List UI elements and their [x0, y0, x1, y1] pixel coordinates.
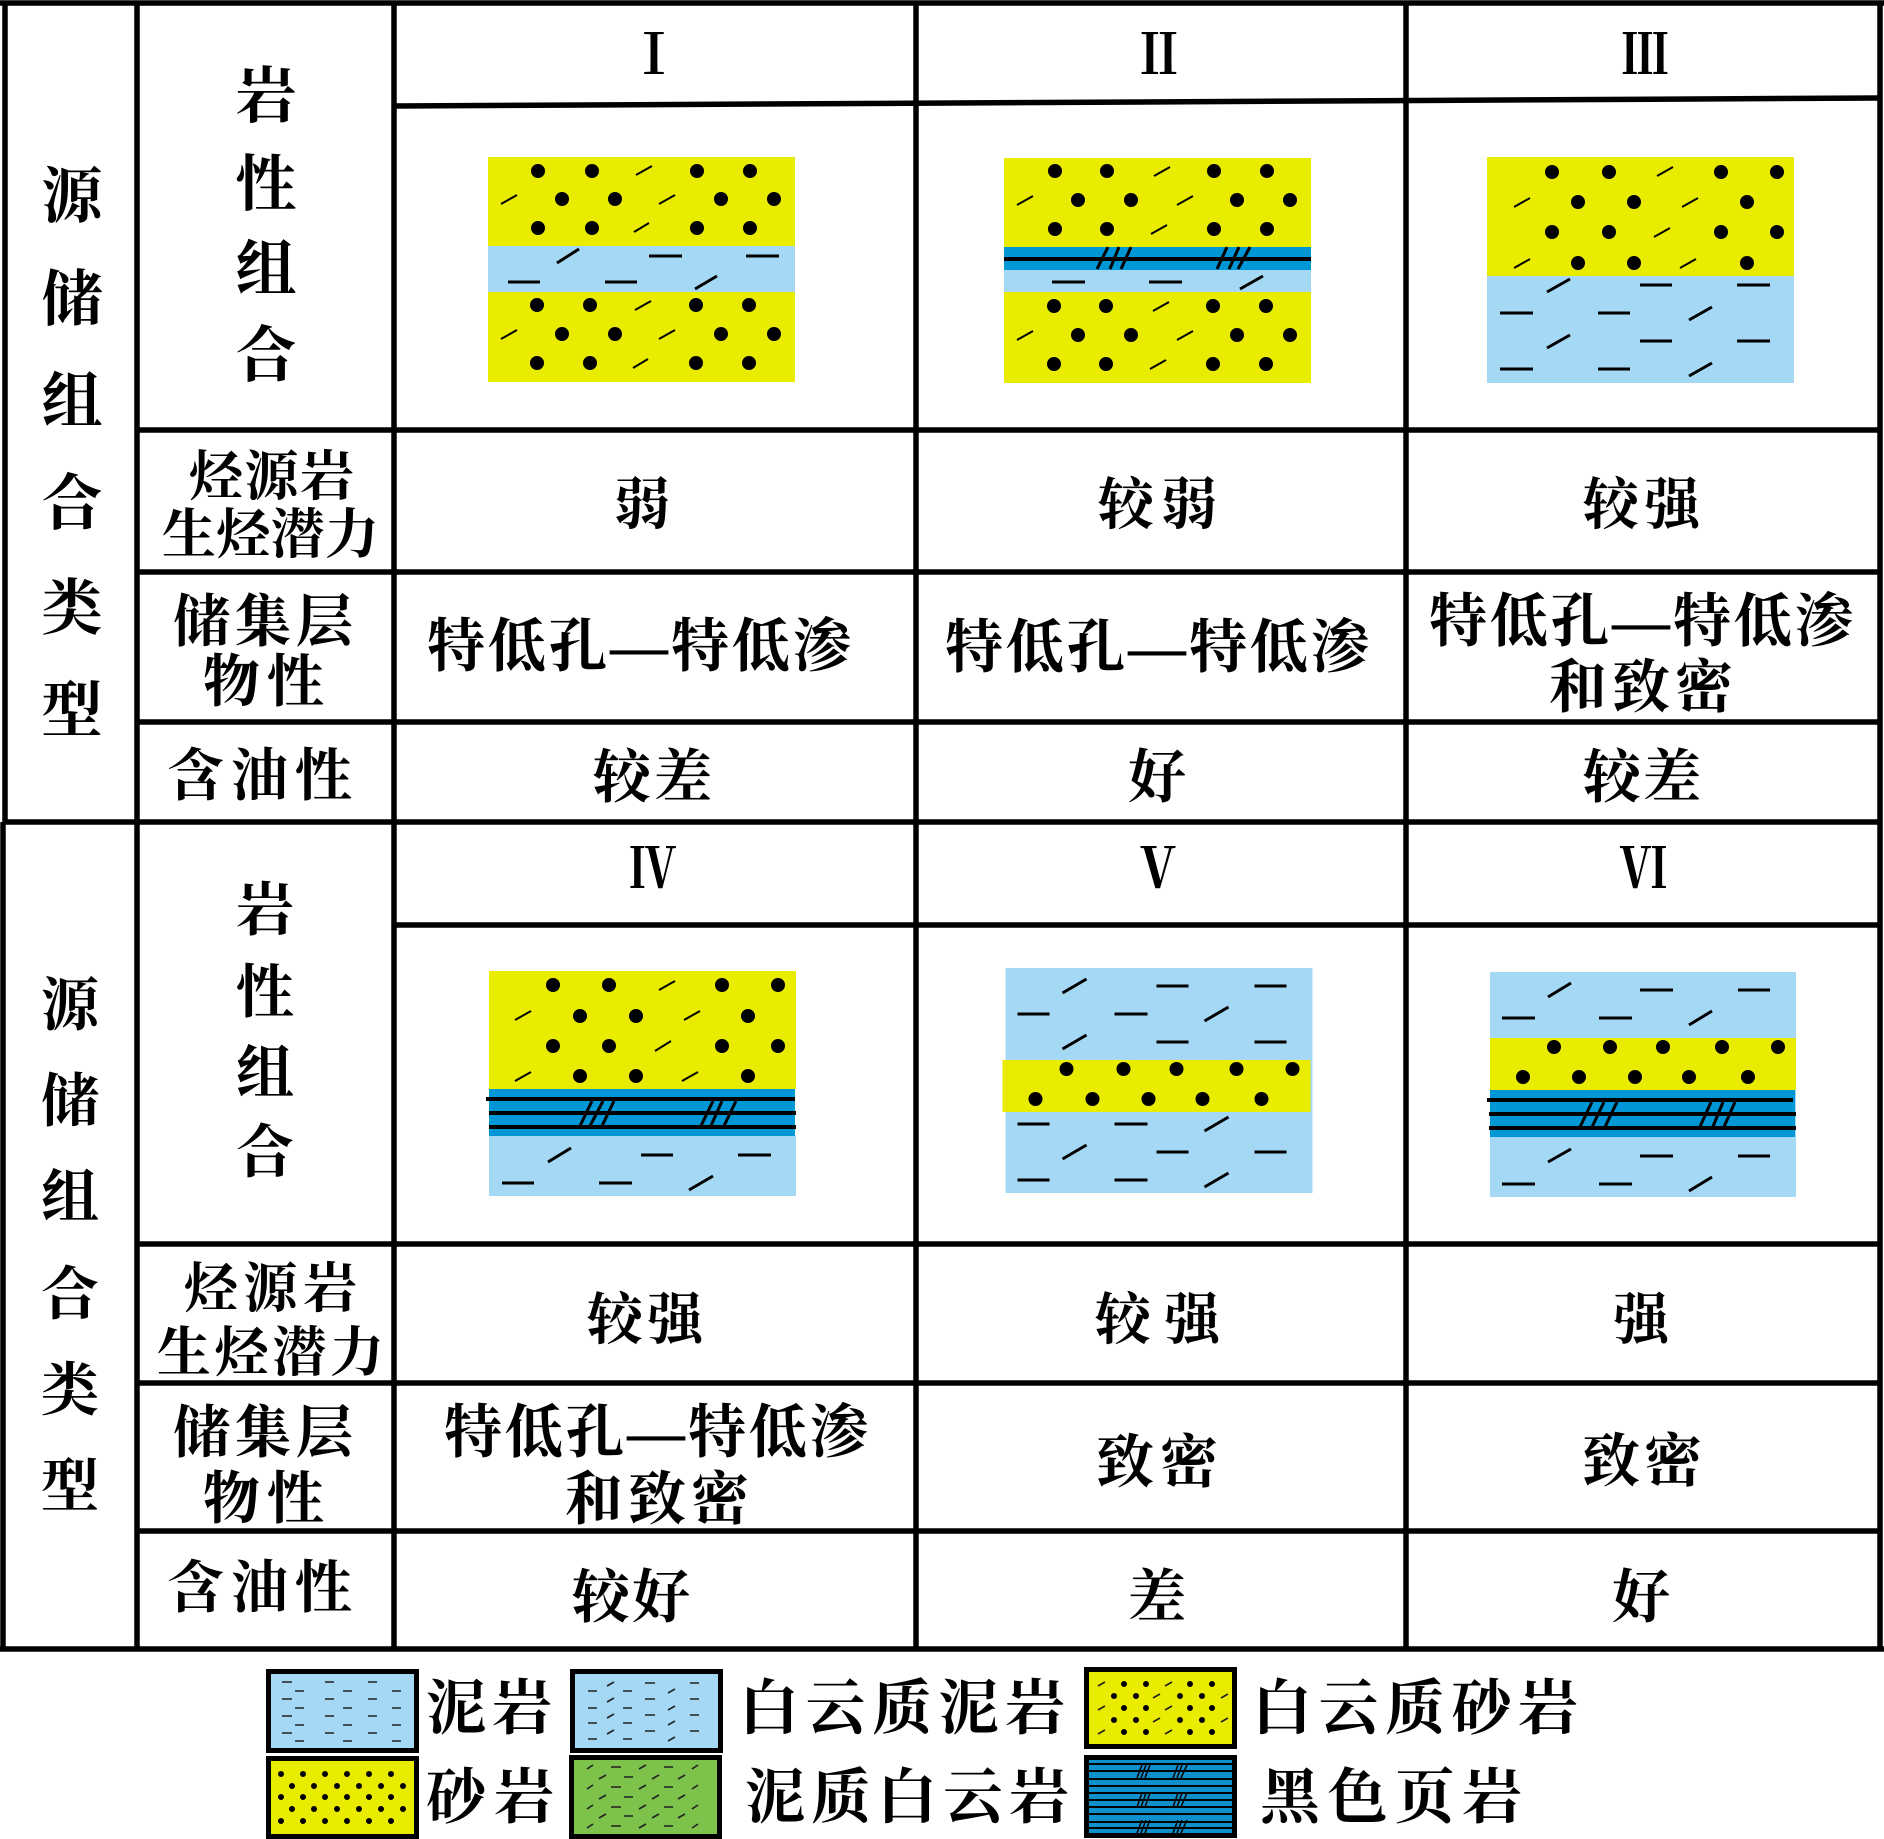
legend item: dolomitic mudstone	[572, 1672, 1065, 1750]
label: source rock potential: 生烃潜力	[162, 505, 379, 565]
row: upper reservoir properties values: 特低孔—特低渗	[945, 615, 1369, 680]
label: source rock potential	[162, 447, 379, 565]
label: lithology combination lower: 组	[236, 1041, 294, 1106]
legend item: dolomitic mudstone: 白云质泥岩	[739, 1676, 1065, 1742]
panel: lower row labels	[41, 878, 384, 1620]
row: lower source rock potential values: 较强	[587, 1290, 708, 1352]
row: lower oil bearing values	[572, 1565, 1670, 1630]
heading: upper source-reservoir combination type: 合	[41, 471, 103, 538]
heading: upper source-reservoir combination type	[41, 164, 106, 745]
row: upper reservoir properties values: 和致密	[1549, 655, 1736, 720]
legend item: argillaceous dolomite: 泥质白云岩	[745, 1765, 1069, 1831]
row: lower reservoir properties values	[444, 1400, 1705, 1532]
row: lower source rock potential values: 较强	[1095, 1290, 1225, 1352]
label: oil bearing lower: 含油性	[167, 1557, 352, 1620]
row: lower reservoir properties values: 和致密	[565, 1467, 752, 1532]
label: reservoir properties: 物性	[203, 651, 324, 714]
legend item: dolomitic sandstone	[1086, 1670, 1578, 1746]
column numerals: lower: Ⅳ	[629, 839, 677, 901]
column numerals: lower: Ⅴ	[1131, 838, 1185, 900]
label: reservoir properties lower: 物性	[203, 1468, 324, 1531]
row: upper reservoir properties values	[427, 589, 1853, 720]
label: lithology combination: 性	[235, 152, 297, 219]
lithology column III	[1487, 157, 1794, 383]
lithology column I	[488, 157, 795, 382]
row: upper reservoir properties values: 特低孔—特低渗	[1429, 589, 1853, 654]
label: lithology combination: 合	[235, 323, 297, 390]
row: lower reservoir properties values: 致密	[1096, 1430, 1221, 1495]
heading: upper source-reservoir combination type: 源	[41, 164, 106, 231]
heading: lower source-reservoir combination type: 源	[41, 973, 103, 1038]
lithology column VI	[1487, 972, 1796, 1197]
row: upper oil bearing values	[593, 745, 1701, 810]
row: upper source rock potential values	[614, 475, 1705, 537]
label: source rock potential: 烃源岩	[187, 447, 354, 507]
lithology column II	[1004, 158, 1311, 383]
legend item: black shale: 黑色页岩	[1260, 1765, 1522, 1831]
row: upper oil bearing values: 较差	[1583, 745, 1701, 810]
row: upper oil bearing values: 较差	[593, 745, 712, 810]
label: lithology combination: 岩	[235, 64, 297, 131]
row: upper source rock potential values: 弱	[614, 475, 670, 537]
heading: upper source-reservoir combination type: 类	[41, 576, 103, 643]
label: source rock potential lower: 生烃潜力	[157, 1323, 384, 1383]
legend item: sandstone	[268, 1758, 554, 1836]
column numerals: upper	[629, 25, 1669, 87]
column numerals: lower	[629, 838, 1667, 901]
label: oil bearing: 含油性	[167, 745, 352, 808]
row: upper source rock potential values: 较强	[1583, 475, 1705, 537]
row: lower reservoir properties values: 致密	[1582, 1429, 1705, 1494]
row: lower oil bearing values: 较好	[572, 1565, 690, 1630]
legend item: argillaceous dolomite	[572, 1758, 1069, 1836]
heading: upper source-reservoir combination type: 储	[41, 267, 103, 334]
label: lithology combination lower: 合	[236, 1120, 294, 1185]
row: lower source rock potential values: 强	[1613, 1290, 1674, 1352]
legend item: black shale	[1086, 1758, 1522, 1836]
label: lithology combination lower: 岩	[236, 878, 294, 943]
heading: lower source-reservoir combination type: 储	[41, 1069, 99, 1134]
label: reservoir properties: 储集层	[173, 591, 355, 654]
lithology column V	[1002, 968, 1312, 1193]
heading: upper source-reservoir combination type: 型	[41, 678, 103, 745]
column numerals: lower: Ⅵ	[1619, 840, 1667, 901]
label: lithology combination lower: 性	[236, 960, 294, 1025]
label: reservoir properties lower	[173, 1402, 355, 1531]
row: upper oil bearing values: 好	[1128, 745, 1186, 810]
label: lithology combination: 组	[235, 237, 297, 304]
heading: lower source-reservoir combination type	[41, 973, 103, 1519]
heading: lower source-reservoir combination type: 组	[41, 1165, 99, 1230]
legend item: mudstone: 泥岩	[426, 1676, 552, 1742]
heading: lower source-reservoir combination type: 型	[41, 1454, 99, 1519]
label: source rock potential lower	[157, 1259, 384, 1383]
column numerals: upper: Ⅰ	[629, 25, 679, 87]
row: lower oil bearing values: 差	[1128, 1565, 1186, 1630]
panel: upper row labels	[41, 64, 379, 808]
heading: upper source-reservoir combination type: 组	[41, 369, 103, 436]
label: reservoir properties lower: 储集层	[173, 1402, 355, 1465]
heading: lower source-reservoir combination type: 合	[41, 1262, 99, 1327]
label: reservoir properties	[173, 591, 355, 714]
row: lower reservoir properties values: 特低孔—特低渗	[444, 1400, 868, 1465]
label: source rock potential lower: 烃源岩	[182, 1259, 357, 1319]
row: lower source rock potential values	[587, 1290, 1674, 1352]
legend item: sandstone: 砂岩	[426, 1765, 554, 1831]
legend item: mudstone	[268, 1672, 552, 1750]
column numerals: upper: Ⅱ	[1134, 25, 1184, 87]
legend	[268, 1670, 1578, 1836]
row: lower oil bearing values: 好	[1612, 1565, 1670, 1630]
row: upper reservoir properties values: 特低孔—特低渗	[427, 614, 851, 679]
legend item: dolomitic sandstone: 白云质砂岩	[1252, 1676, 1578, 1742]
heading: lower source-reservoir combination type: 类	[41, 1358, 99, 1423]
column numerals: upper: Ⅲ	[1621, 26, 1669, 87]
row: upper source rock potential values: 较弱	[1098, 475, 1217, 537]
label: lithology combination	[235, 64, 297, 390]
lithology column IV	[486, 971, 796, 1196]
label: lithology combination lower	[236, 878, 294, 1185]
